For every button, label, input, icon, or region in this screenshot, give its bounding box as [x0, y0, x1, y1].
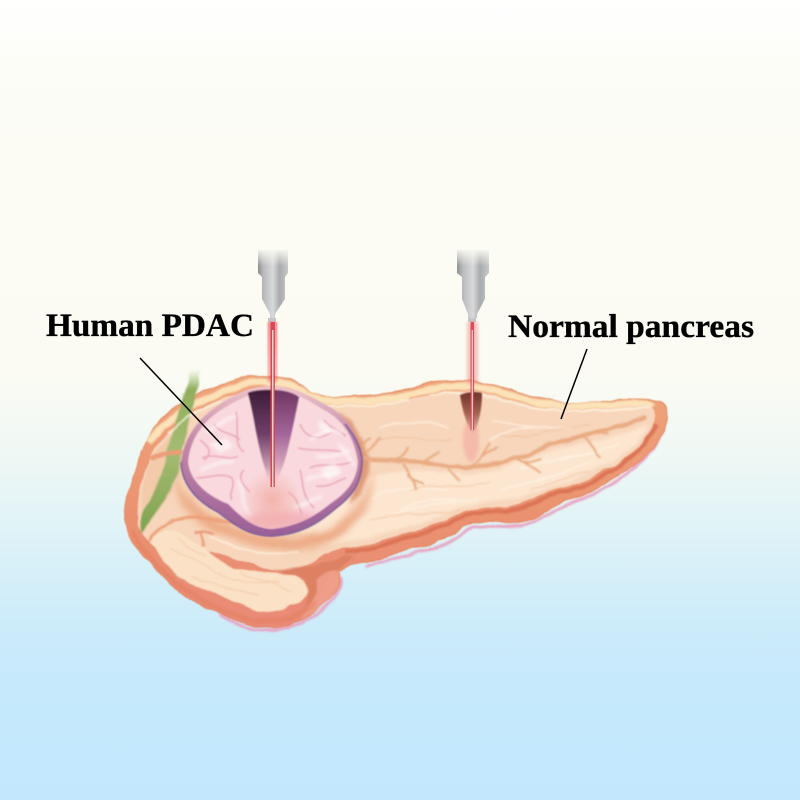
body lower lobe	[288, 426, 648, 546]
pancreas outer rim	[125, 376, 667, 628]
head small vessel	[195, 531, 214, 546]
head outer lobe tone	[141, 420, 192, 530]
lobe highlights	[210, 420, 620, 553]
right laser probe	[454, 248, 492, 430]
probe tip	[468, 318, 476, 322]
uncinate lobe	[150, 530, 308, 612]
pancreas top cream band	[150, 382, 654, 442]
lower edge red band	[346, 424, 657, 553]
gap fold under head	[272, 556, 354, 608]
tumor capsule	[181, 386, 362, 536]
laser beam glow	[467, 322, 478, 384]
tumor capsule edge	[181, 424, 362, 536]
laser beam core	[270, 322, 275, 487]
tumor folds	[196, 412, 354, 531]
highlight over head top	[168, 393, 650, 434]
probe body	[258, 250, 288, 318]
leader line: Human PDAC	[140, 358, 222, 445]
head lower rim shading	[132, 530, 316, 622]
laser beam core	[470, 322, 474, 430]
probe body	[457, 250, 489, 318]
shadow right of tumor	[338, 412, 369, 506]
leader line: Normal pancreas	[561, 349, 587, 419]
head shading around tumor	[175, 470, 373, 550]
tumor laser channel	[248, 390, 299, 488]
left laser probe	[255, 248, 291, 487]
pancreatic duct	[362, 418, 644, 488]
probe tip	[268, 318, 276, 322]
pancreas illustration	[125, 368, 667, 631]
label: Normal pancreas: Normal pancreas	[508, 309, 754, 345]
tumor	[181, 386, 362, 536]
pancreas body base	[138, 388, 655, 571]
lobe soft folds	[370, 424, 590, 520]
tumor flesh	[188, 390, 358, 529]
label: Human PDAC: Human PDAC	[46, 308, 254, 344]
green vessel	[141, 368, 201, 533]
uncinate rim pink	[300, 570, 339, 620]
head branch vessel	[152, 451, 182, 459]
upper head vessel fold	[150, 517, 236, 541]
normal tissue laser channel	[460, 392, 482, 462]
uncinate lobe folds	[170, 538, 290, 596]
laser beam glow	[268, 322, 278, 382]
lower rim lilac shadow	[220, 430, 663, 631]
